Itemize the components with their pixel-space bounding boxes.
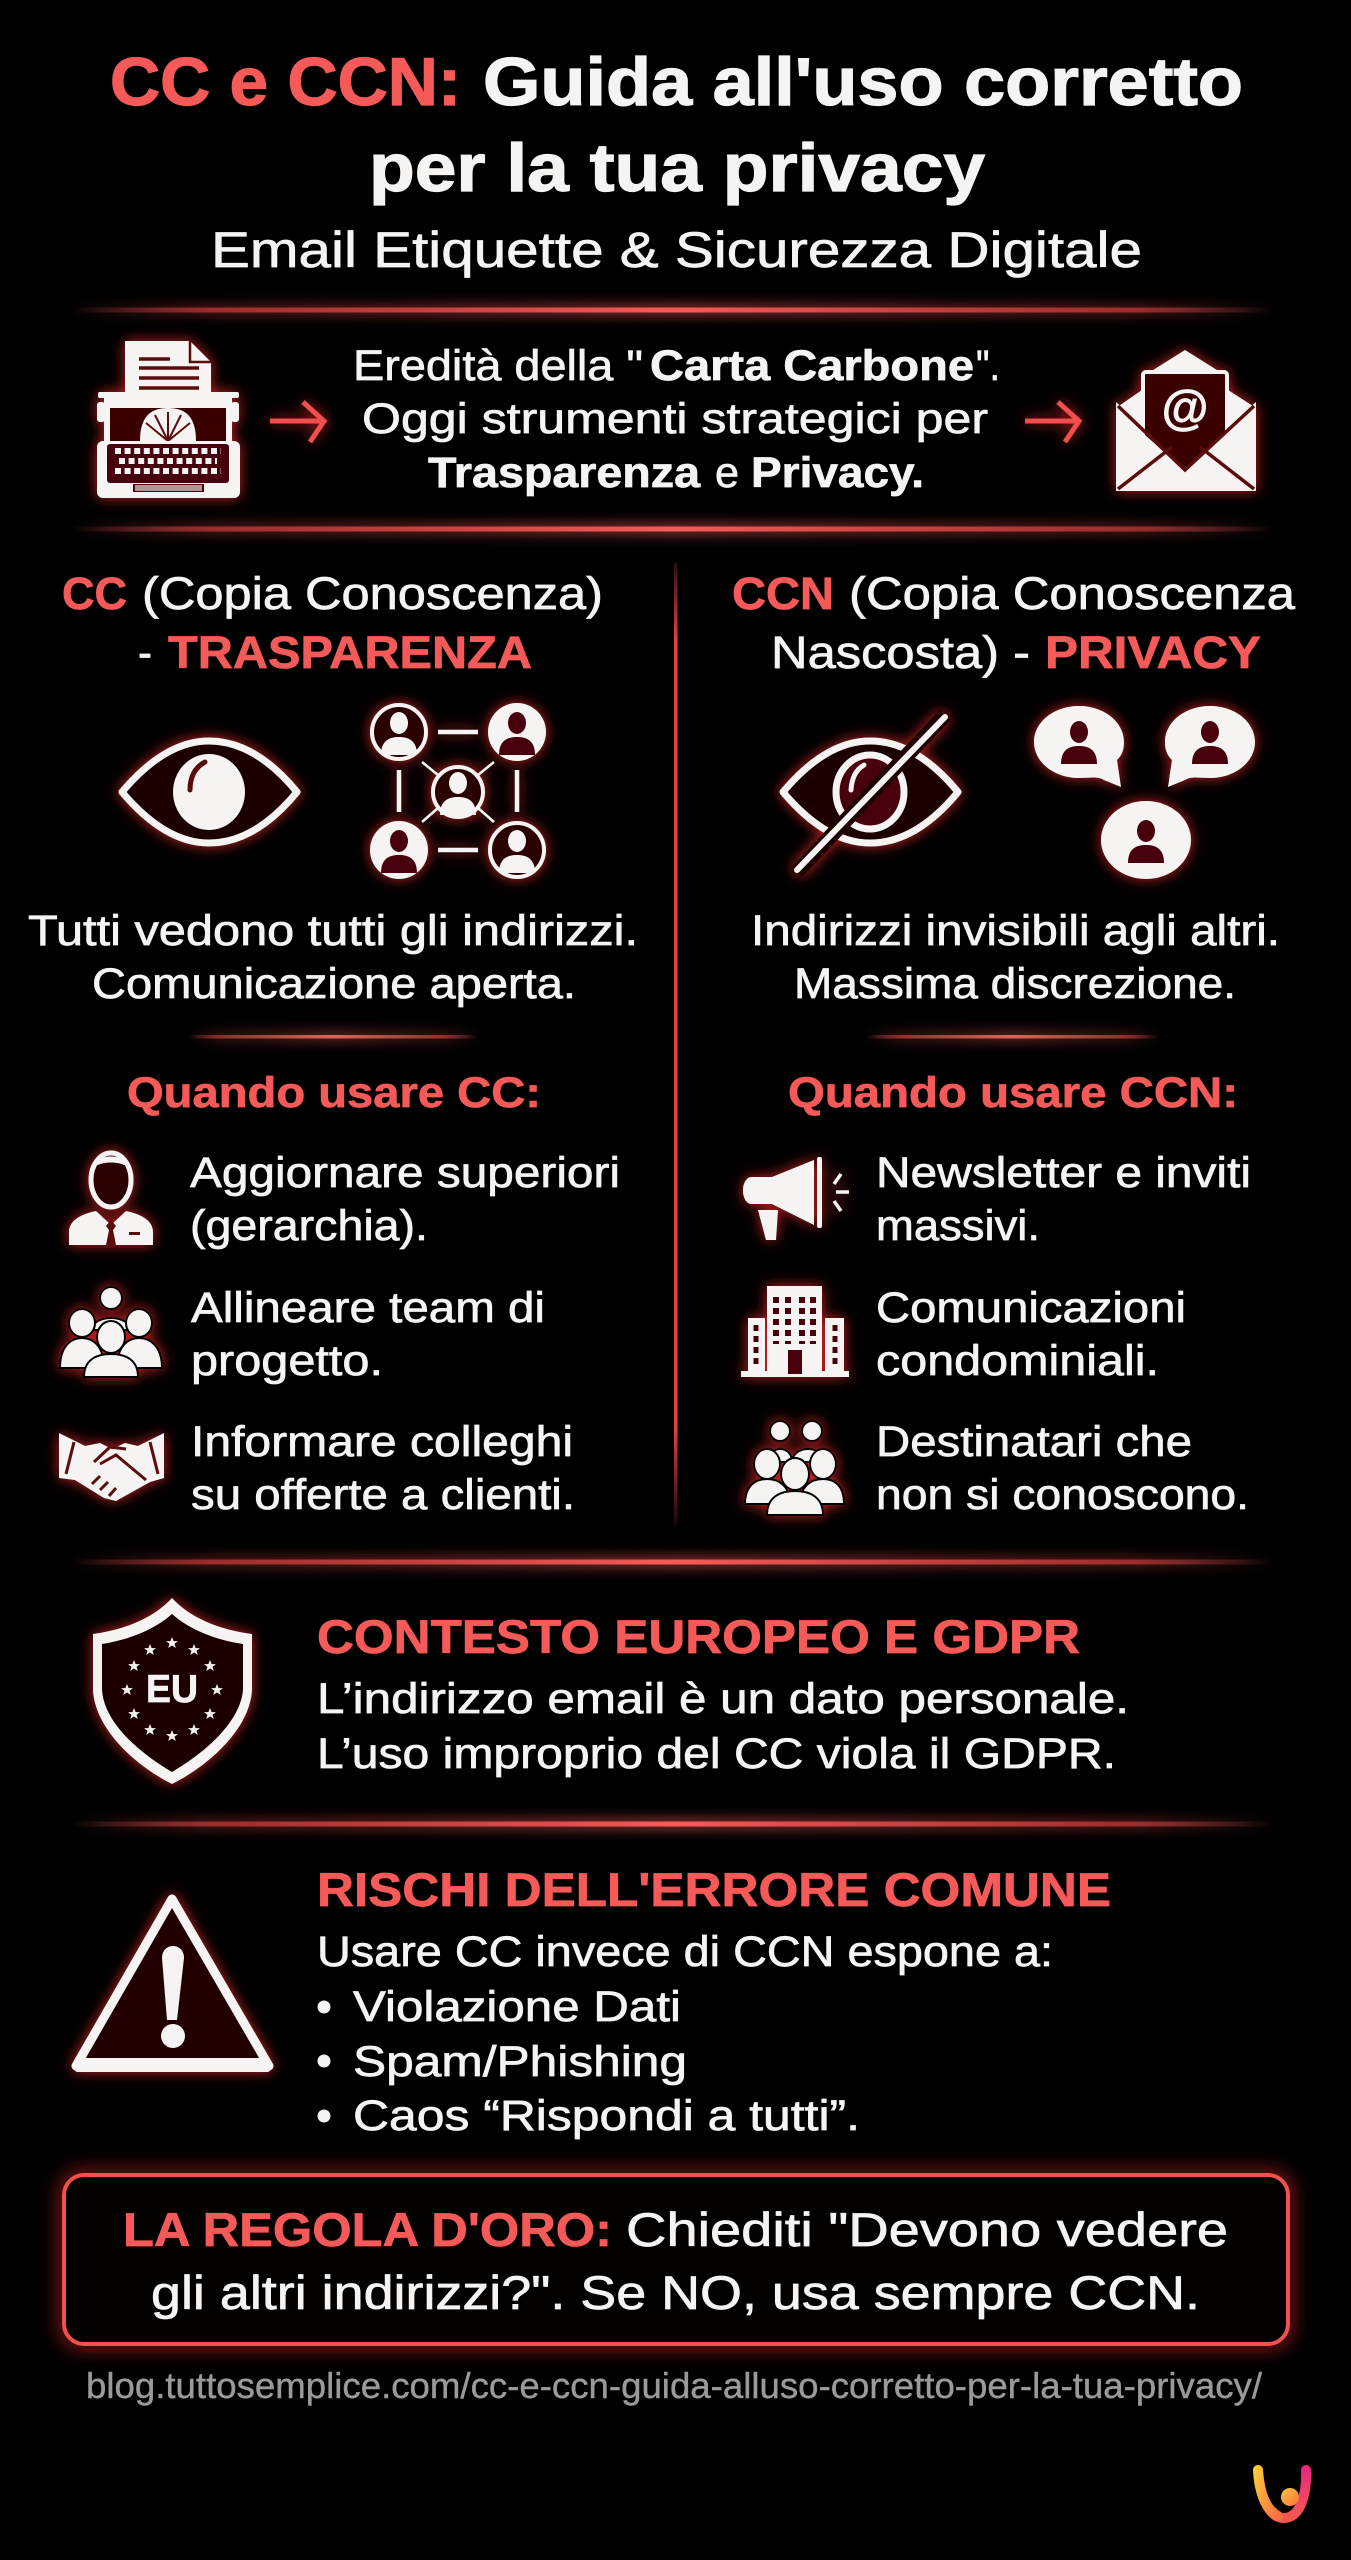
list item: newsletter: Newsletter e inviti xyxy=(876,1149,1251,1197)
CCN heading xyxy=(732,568,1296,678)
GDPR text: L’uso improprio del CC viola il GDPR. xyxy=(317,1730,1116,1778)
icon: eye xyxy=(122,741,297,843)
list item: newsletter: massivi. xyxy=(876,1202,1040,1250)
intro row xyxy=(97,341,1256,498)
golden rule text: Chiediti "Devono vedere xyxy=(626,2203,1228,2256)
list item: superiors: (gerarchia). xyxy=(190,1202,428,1250)
list item: condominium: Comunicazioni xyxy=(876,1284,1186,1332)
CC heading: TRASPARENZA xyxy=(168,627,532,678)
icon: handshake xyxy=(59,1433,164,1501)
risks list: Caos “Rispondi a tutti”. xyxy=(353,2092,860,2140)
arrow: text to envelope xyxy=(1025,402,1079,442)
title line 1: CC e CCN: xyxy=(110,44,461,120)
title line 1 xyxy=(110,44,1243,120)
list item: colleagues: Informare colleghi xyxy=(191,1418,573,1466)
GDPR heading: CONTESTO EUROPEO E GDPR xyxy=(317,1610,1080,1663)
divider CCN xyxy=(866,1032,1159,1041)
intro text: Carta Carbone xyxy=(650,342,974,390)
CCN description: Massima discrezione. xyxy=(794,960,1236,1008)
intro text: Trasparenza xyxy=(428,449,701,497)
list item: strangers: Destinatari che xyxy=(876,1418,1192,1466)
GDPR text: L’indirizzo email è un dato personale. xyxy=(317,1675,1129,1723)
panel: CCN xyxy=(732,568,1296,1519)
divider top xyxy=(70,304,1275,316)
list item: condominium: condominiali. xyxy=(876,1337,1159,1385)
CCN heading: PRIVACY xyxy=(1045,627,1261,678)
intro text: e xyxy=(715,449,739,497)
CCN description xyxy=(751,907,1280,1008)
divider panels xyxy=(70,1556,1275,1568)
CCN description: Indirizzi invisibili agli altri. xyxy=(751,907,1280,955)
icon: EU shield xyxy=(93,1598,252,1784)
icon: manager xyxy=(69,1153,153,1245)
panel: CC xyxy=(28,568,638,1519)
list item: superiors xyxy=(69,1149,620,1250)
title line 2: per la tua privacy xyxy=(369,130,985,206)
icon: crossed eye xyxy=(783,715,958,872)
icon: EU shield: EU xyxy=(146,1668,198,1711)
icon: email envelope xyxy=(1116,350,1256,491)
list item: colleagues: su offerte a clienti. xyxy=(191,1471,575,1519)
panel: GDPR xyxy=(93,1598,1129,1784)
CCN heading: Nascosta) - xyxy=(771,627,1030,678)
CC heading: - xyxy=(138,627,152,678)
list item: superiors: Aggiornare superiori xyxy=(190,1149,620,1197)
list item: colleagues xyxy=(59,1418,575,1519)
intro text: Eredità della " xyxy=(353,342,643,390)
CC description: Tutti vedono tutti gli indirizzi. xyxy=(28,907,638,955)
vertical column divider xyxy=(674,563,678,1525)
divider CC xyxy=(188,1032,478,1041)
risks list: Violazione Dati xyxy=(353,1983,681,2031)
CC heading: (Copia Conoscenza) xyxy=(142,568,603,619)
golden rule text: LA REGOLA D'ORO: xyxy=(123,2203,612,2256)
list item: project team xyxy=(60,1284,545,1385)
divider GDPR xyxy=(70,1818,1275,1830)
CC description: Comunicazione aperta. xyxy=(92,960,576,1008)
icon: hidden recipients xyxy=(1034,706,1255,879)
icon: contact network xyxy=(370,703,546,879)
risks list xyxy=(318,1983,860,2140)
callout: golden rule xyxy=(64,2175,1288,2344)
list item: project team: Allineare team di xyxy=(191,1284,545,1332)
risks intro: Usare CC invece di CCN espone a: xyxy=(317,1928,1053,1976)
arrow: typewriter to text xyxy=(270,402,324,442)
icon: logo xyxy=(1258,2470,1306,2518)
risks list: Spam/Phishing xyxy=(353,2038,687,2086)
list item: strangers xyxy=(745,1418,1249,1519)
list item: strangers: non si conoscono. xyxy=(876,1471,1249,1519)
icon: building xyxy=(741,1286,849,1377)
CCN heading: CCN xyxy=(732,568,834,619)
CC heading xyxy=(62,568,603,678)
list item: project team: progetto. xyxy=(191,1337,383,1385)
intro text: Oggi strumenti strategici per xyxy=(362,395,988,443)
intro text xyxy=(353,342,1000,497)
golden rule text: gli altri indirizzi?". Se NO, usa sempre CCN. xyxy=(151,2266,1200,2319)
list item: condominium xyxy=(741,1284,1186,1385)
icon: team xyxy=(60,1287,162,1377)
heading: when to use CC: Quando usare CC: xyxy=(127,1069,541,1117)
golden rule text xyxy=(123,2203,1228,2319)
source URL: blog.tuttosemplice.com/cc-e-ccn-guida-alluso-corretto-per-la-tua-privacy/ xyxy=(86,2365,1262,2406)
icon: crowd xyxy=(745,1421,844,1515)
heading: when to use CCN: Quando usare CCN: xyxy=(788,1069,1238,1117)
title line 1: Guida all'uso corretto xyxy=(483,44,1243,120)
subtitle: Email Etiquette & Sicurezza Digitale xyxy=(211,222,1142,278)
icon: email envelope: @ xyxy=(1162,382,1208,435)
CC heading: CC xyxy=(62,568,127,619)
icon: megaphone xyxy=(743,1157,849,1240)
panel: risks xyxy=(74,1863,1111,2140)
CCN heading: (Copia Conoscenza xyxy=(849,568,1296,619)
risks heading: RISCHI DELL'ERRORE COMUNE xyxy=(317,1863,1111,1916)
divider intro xyxy=(70,523,1275,535)
icon: warning triangle xyxy=(74,1899,271,2072)
intro text: Privacy. xyxy=(751,449,924,497)
header xyxy=(110,44,1243,278)
GDPR text xyxy=(317,1675,1129,1778)
list item: newsletter xyxy=(743,1149,1251,1250)
intro text: ". xyxy=(976,342,1000,390)
CC description xyxy=(28,907,638,1008)
icon: typewriter xyxy=(97,341,240,498)
